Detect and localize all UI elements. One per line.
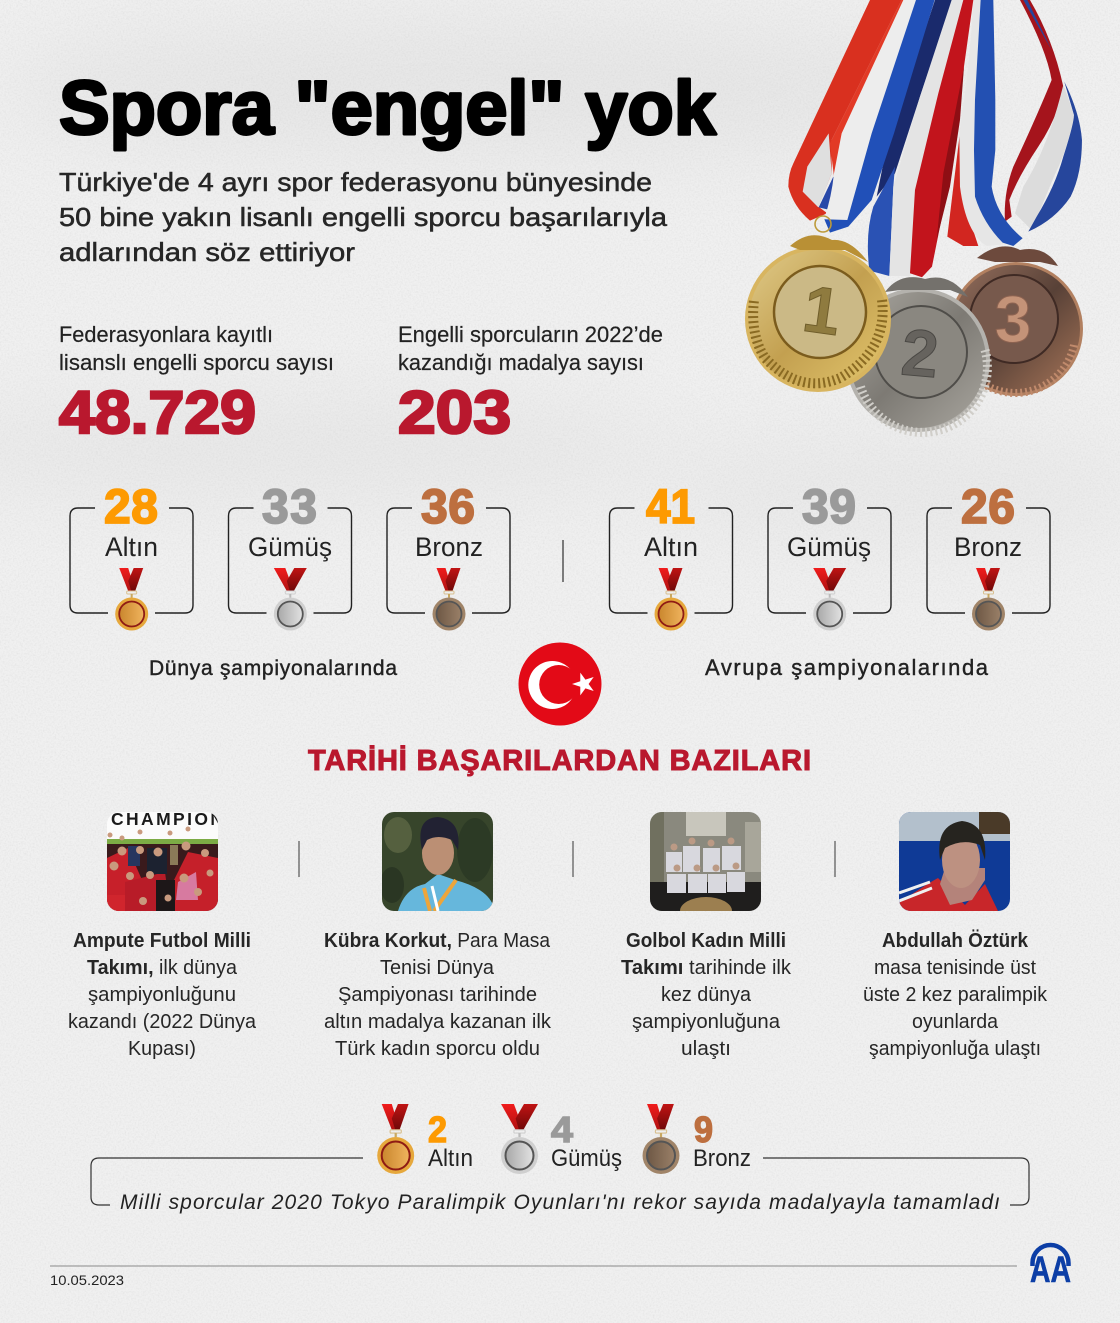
text: goalball women's team: ulaştı (681, 1038, 731, 1060)
icon: Anadolu Agency logo: AA (1030, 1249, 1071, 1290)
hero image: three medals with ribbons (745, 0, 1083, 432)
stat box: world silver 33: 33 (262, 481, 317, 534)
Tokyo medal: silver 4: 4 (551, 1109, 573, 1150)
stat: medals won in 2022: 203 (398, 379, 511, 446)
divider (572, 841, 574, 877)
stat: licensed athletes (59, 322, 334, 446)
stat box: europe gold 41: Altın (644, 532, 698, 562)
subtitle: adlarından söz ettiriyor (59, 237, 355, 267)
text: Abdullah Öztürk: masa tenisinde üst (874, 957, 1036, 979)
silver strap (877, 0, 953, 197)
text: Abdullah Öztürk (863, 929, 1048, 1060)
text: Kübra Korkut (324, 930, 552, 1060)
caption: european championships: Avrupa şampiyonalarında (705, 655, 989, 680)
Tokyo caption: Milli sporcular 2020 Tokyo Paralimpik Oyunları'nı rekor sayıda madalyayla tamamladı (120, 1191, 1000, 1214)
Tokyo medal: bronze 9 (643, 1104, 751, 1174)
text: Kübra Korkut: Tenisi Dünya (380, 957, 495, 979)
text: amputee football team: Kupası) (128, 1038, 196, 1060)
text: amputee football team (68, 930, 257, 1060)
stat box: world gold 28 (70, 481, 193, 630)
text: Kübra Korkut: Şampiyonası tarihinde (338, 984, 537, 1006)
bronze strap (947, 127, 978, 246)
photo: amputee football team: CHAMPION (111, 809, 223, 829)
gold medal (745, 216, 891, 392)
divider (834, 841, 836, 877)
gold strap: front strand (830, 0, 907, 177)
text: amputee football team: kazandı (2022 Dünya (68, 1011, 257, 1033)
photo: amputee football team (107, 809, 223, 911)
photo: Kübra Korkut (380, 812, 493, 911)
text: goalball women's team (621, 930, 792, 1060)
stat box: europe silver 39: 39 (802, 481, 856, 534)
right loop ribbon (1005, 0, 1063, 222)
Tokyo frame (91, 1158, 1029, 1205)
text: amputee football team: Ampute Futbol Milli (73, 930, 251, 952)
divider between world and europe (562, 540, 564, 582)
gold strap: back strand (788, 0, 902, 221)
title: Spora "engel" yok (59, 66, 717, 151)
stat box: europe silver 39 (768, 481, 891, 630)
icon: Turkish flag (518, 642, 602, 726)
Tokyo medal: bronze 9: Bronz (693, 1145, 751, 1172)
silver medal (846, 277, 990, 432)
stat: medals won in 2022 (398, 322, 663, 446)
text: Abdullah Öztürk: üste 2 kez paralimpik (863, 984, 1048, 1006)
Tokyo medal: silver 4 (501, 1104, 622, 1174)
Tokyo medal: gold 2: Altın (428, 1145, 473, 1172)
text: goalball women's team: şampiyonluğuna (632, 1011, 781, 1033)
stat box: world bronze 36: Bronz (415, 532, 483, 562)
text: Abdullah Öztürk: Abdullah Öztürk (882, 929, 1029, 952)
stat box: world bronze 36: 36 (421, 481, 475, 534)
stat: licensed athletes: lisanslı engelli sporcu sayısı (59, 350, 334, 375)
stat box: world silver 33 (228, 481, 352, 630)
stat box: world gold 28: 28 (104, 481, 158, 534)
text: amputee football team: şampiyonluğunu (88, 984, 236, 1006)
text: goalball women's team: Golbol Kadın Milli (626, 930, 786, 952)
silver medal: 2 (898, 315, 942, 391)
text: Abdullah Öztürk: şampiyonluğa ulaştı (869, 1038, 1041, 1060)
text: Abdullah Öztürk: oyunlarda (912, 1011, 999, 1033)
gold medal: 1 (799, 271, 845, 349)
text: Kübra Korkut: altın madalya kazanan ilk (324, 1011, 552, 1033)
stat box: europe gold 41: 41 (646, 481, 695, 534)
stat box: europe bronze 26: Bronz (954, 532, 1022, 562)
stat: licensed athletes: 48.729 (59, 379, 256, 446)
text: Kübra Korkut: Türk kadın sporcu oldu (335, 1038, 540, 1060)
text: Kübra Korkut: Kübra Korkut, Para Masa (324, 930, 551, 952)
subtitle (59, 167, 668, 267)
bronze medal: 3 (995, 282, 1031, 356)
section heading: TARİHİ BAŞARILARDAN BAZILARI (308, 745, 811, 777)
stat box: europe silver 39: Gümüş (787, 532, 871, 562)
stat box: europe bronze 26 (927, 481, 1050, 630)
stat box: world gold 28: Altın (105, 532, 158, 562)
stat box: europe bronze 26: 26 (961, 481, 1015, 534)
Tokyo medal: gold 2 (377, 1104, 473, 1174)
photo: Abdullah Öztürk (899, 812, 1010, 911)
Tokyo medal: bronze 9: 9 (694, 1109, 713, 1150)
divider (298, 841, 300, 877)
text: goalball women's team: Takımı tarihinde ilk (621, 957, 792, 979)
bronze medal (949, 246, 1083, 396)
stat: licensed athletes: Federasyonlara kayıtlı (59, 322, 273, 347)
Tokyo medal: gold 2: 2 (428, 1109, 447, 1150)
Tokyo medal: silver 4: Gümüş (551, 1145, 622, 1172)
subtitle: Türkiye'de 4 ayrı spor federasyonu bünyesinde (59, 167, 652, 197)
text: amputee football team: Takımı, ilk dünya (87, 957, 238, 979)
footer rule (50, 1265, 1017, 1267)
subtitle: 50 bine yakın lisanlı engelli sporcu başarılarıyla (59, 202, 668, 232)
stat box: world bronze 36 (387, 481, 510, 630)
date: 10.05.2023 (50, 1272, 124, 1288)
stat: medals won in 2022: kazandığı madalya sayısı (398, 350, 644, 375)
stat: medals won in 2022: Engelli sporcuların 2022’de (398, 322, 663, 347)
stat box: world silver 33: Gümüş (248, 532, 332, 562)
stat box: europe gold 41 (610, 481, 732, 630)
caption: world championships: Dünya şampiyonalarında (149, 657, 397, 680)
text: goalball women's team: kez dünya (661, 984, 752, 1006)
photo: goalball women's team (650, 812, 761, 911)
